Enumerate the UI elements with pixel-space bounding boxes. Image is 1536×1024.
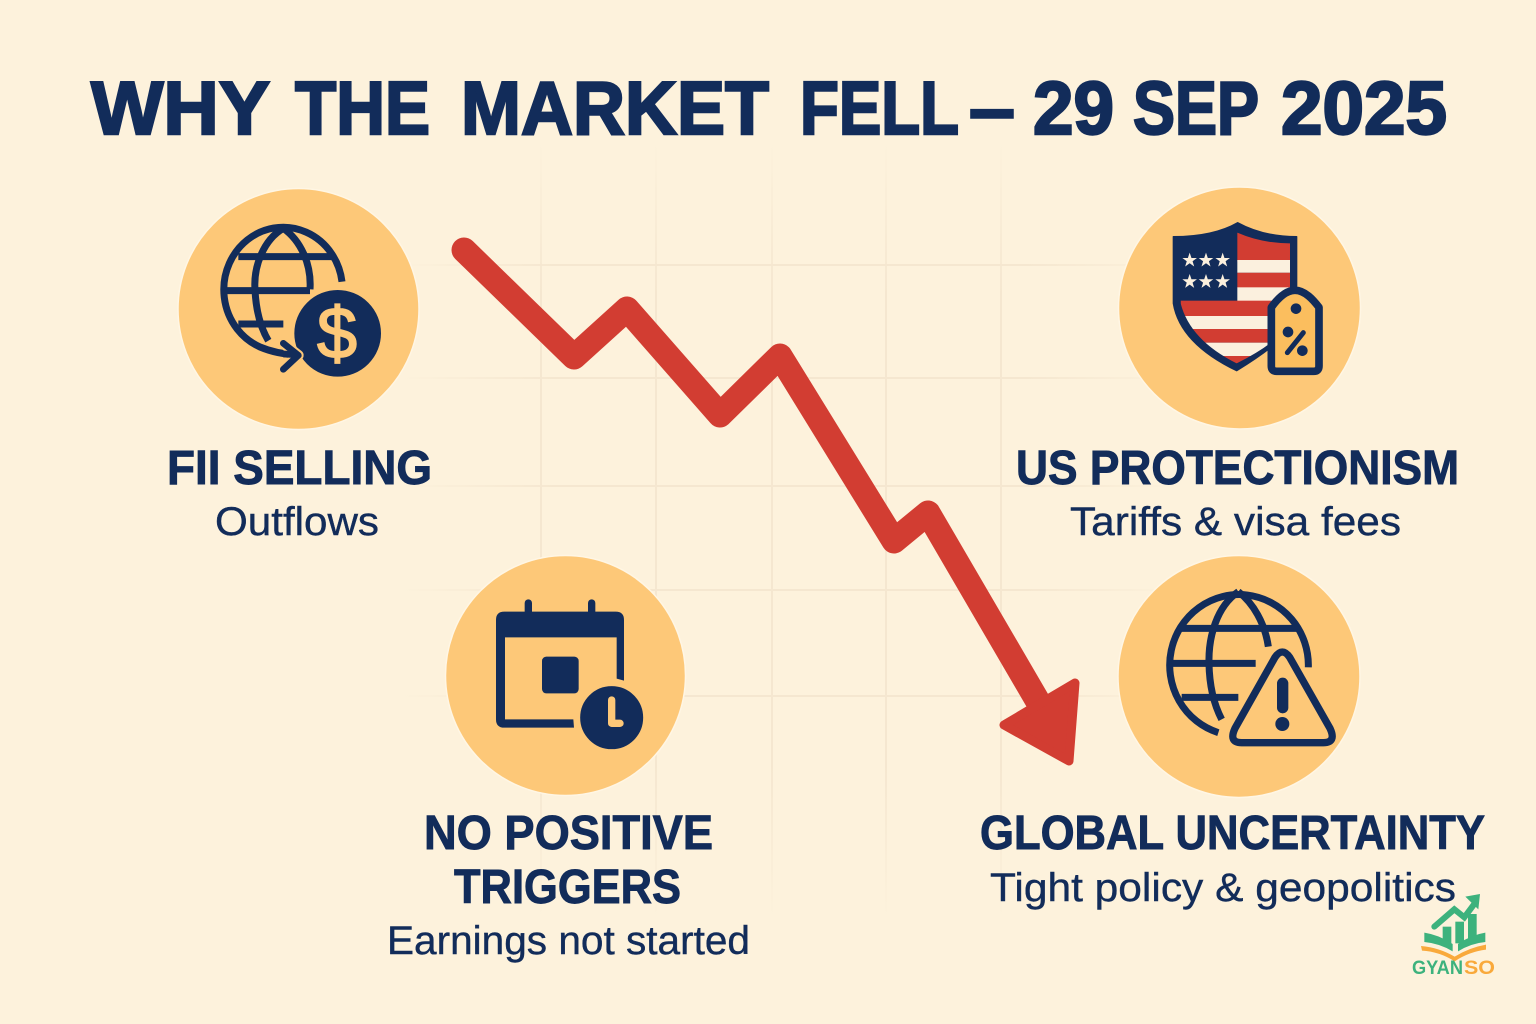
title: MARKET: [461, 66, 769, 150]
subtext: outflows: Outflows: [215, 500, 379, 544]
title: THE: [295, 66, 430, 150]
title: SEP: [1133, 66, 1259, 150]
icon: calendar with clock: [446, 556, 686, 796]
heading: no positive triggers: NO POSITIVE: [424, 807, 713, 860]
icon: globe with warning triangle: [1118, 556, 1360, 798]
panel: FII selling: [167, 188, 432, 544]
subtext: tight policy and geopolitics: Tight policy & geopolitics: [990, 866, 1456, 910]
logo: Gyanso: GYAN: [1412, 958, 1463, 979]
title: 29: [1033, 66, 1114, 150]
arrow: falling market line: [464, 250, 1075, 761]
heading: no positive triggers: TRIGGERS: [454, 861, 681, 914]
title: 2025: [1281, 66, 1447, 150]
icon: US flag shield with percent tag: [1118, 187, 1360, 429]
icon: globe with dollar coin: $: [317, 294, 357, 374]
heading: global uncertainty: GLOBAL UNCERTAINTY: [980, 807, 1485, 860]
panel: US protectionism: [1016, 187, 1459, 544]
icon: globe with dollar coin: [178, 188, 419, 430]
title: WHY: [91, 66, 270, 150]
title: [91, 66, 1447, 150]
title: FELL: [800, 66, 959, 150]
heading: FII selling: FII SELLING: [167, 442, 432, 495]
heading: US protectionism: US PROTECTIONISM: [1016, 442, 1459, 495]
heading: no positive triggers: [424, 807, 713, 914]
logo: Gyanso: SO: [1464, 958, 1495, 979]
logo: Gyanso: [1412, 894, 1495, 979]
title: –: [969, 66, 1015, 150]
subtext: earnings not started: Earnings not started: [387, 919, 750, 963]
subtext: tariffs and visa fees: Tariffs & visa fees: [1070, 500, 1401, 544]
panel: no positive triggers: [387, 556, 750, 963]
panel: global uncertainty: [980, 556, 1485, 910]
